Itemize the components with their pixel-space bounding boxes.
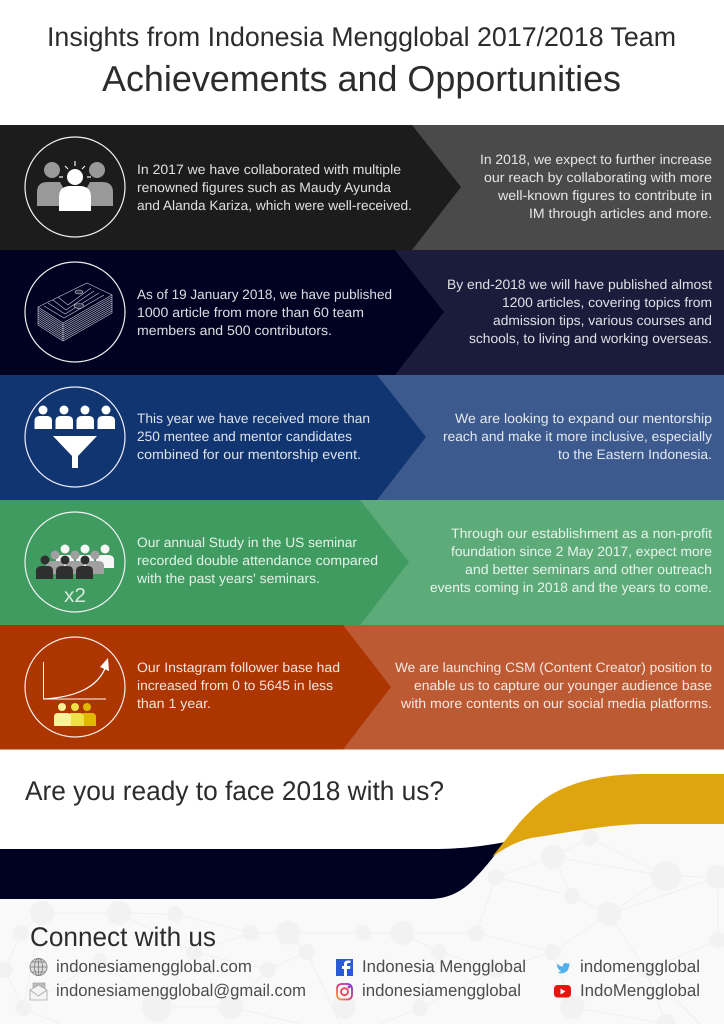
text: 2018 collaboration: [480, 152, 712, 221]
text: 1000 articles: members and 500 contributors.: [137, 323, 332, 338]
text: seminar attendance: [136, 535, 378, 586]
text: seminar attendance: Our annual Study in the US seminar: [137, 535, 357, 550]
navy wave: [0, 842, 505, 899]
contact: facebook: Indonesia Mengglobal: [362, 957, 526, 976]
text: mentorship 2018: [443, 411, 712, 462]
icon: envelope: [30, 983, 47, 1000]
text: 2017 collaboration: renowned figures such as Maudy Ayunda: [137, 180, 391, 195]
icon: globe: [30, 958, 47, 976]
icon: people and funnel: [25, 387, 125, 487]
icon: people with highlighted figure: [25, 137, 125, 237]
title: [47, 22, 676, 99]
text: seminar attendance: with the past years' seminars.: [136, 571, 320, 586]
title: Insights from Indonesia Mengglobal 2017/2018 Team: [47, 22, 676, 52]
text: follower growth: increased from 0 to 5645 in less: [137, 678, 333, 693]
text: 2018 collaboration: In 2018, we expect to further increase: [480, 152, 712, 167]
text: 2018 collaboration: well-known figures to contribute in: [497, 188, 712, 203]
icon: growth chart with people: [25, 637, 125, 737]
contact: instagram: indonesiamengglobal: [362, 981, 521, 1000]
text: non-profit foundation: and better seminars and other outreach: [465, 562, 712, 577]
text: 1000 articles: 1000 article from more than 60 team: [137, 305, 364, 320]
text: content creator position: with more contents on our social media platforms.: [400, 696, 712, 711]
panel: mentorship: [0, 375, 724, 500]
text: non-profit foundation: events coming in 2018 and the years to come.: [430, 580, 712, 595]
icon: stack of papers: [25, 262, 125, 362]
text: 2018 collaboration: IM through articles and more.: [529, 206, 712, 221]
text: 1000 articles: As of 19 January 2018, we have published: [137, 287, 392, 302]
icon: doubled audience: x2: [64, 585, 86, 607]
text: mentorship 2017: 250 mentee and mentor candidates: [137, 429, 352, 444]
text: content creator position: [395, 660, 712, 711]
text: mentorship 2017: This year we have received more than: [137, 411, 370, 426]
text: 1200 articles: 1200 articles, covering topics from: [502, 295, 712, 310]
text: 2017 collaboration: In 2017 we have collaborated with multiple: [137, 162, 401, 177]
text: mentorship 2017: combined for our mentorship event.: [137, 447, 361, 462]
text: non-profit foundation: Through our establishment as a non-profit: [451, 526, 712, 541]
text: 1200 articles: admission tips, various courses and: [493, 313, 712, 328]
panel: articles: [0, 250, 724, 375]
icon: twitter: [557, 963, 570, 973]
text: 2017 collaboration: and Alanda Kariza, which were well-received.: [137, 198, 412, 213]
text: mentorship 2018: reach and make it more inclusive, especially: [443, 429, 712, 444]
text: 1000 articles: [137, 287, 392, 338]
icon: youtube: [554, 985, 571, 998]
text: mentorship 2017: [137, 411, 370, 462]
panel: instagram: [0, 625, 724, 750]
text: seminar attendance: recorded double attendance compared: [137, 553, 378, 568]
text: mentorship 2018: We are looking to expand our mentorship: [455, 411, 712, 426]
gold wave: [492, 774, 724, 857]
white area above wave: [0, 750, 724, 857]
text: non-profit foundation: [430, 526, 712, 595]
icon: instagram: [337, 984, 352, 1000]
text: 2018 collaboration: our reach by collaborating with more: [484, 170, 712, 185]
text: 2017 collaboration: [137, 162, 412, 213]
icon: facebook: [336, 959, 353, 976]
text: content creator position: We are launching CSM (Content Creator) position to: [395, 660, 712, 675]
closing question: Are you ready to face 2018 with us?: [25, 776, 444, 806]
contact: twitter: indomengglobal: [580, 957, 700, 976]
text: follower growth: [137, 660, 340, 711]
text: content creator position: enable us to capture our younger audience base: [414, 678, 712, 693]
title: Achievements and Opportunities: [102, 58, 621, 99]
text: 1200 articles: schools, to living and working overseas.: [469, 331, 712, 346]
contact: website: indonesiamengglobal.com: [56, 957, 252, 976]
text: 1200 articles: [447, 277, 712, 346]
contact: youtube: IndoMengglobal: [580, 981, 700, 1000]
text: mentorship 2018: to the Eastern Indonesia.: [558, 447, 712, 462]
text: follower growth: Our Instagram follower base had: [137, 660, 340, 675]
text: follower growth: than 1 year.: [137, 696, 211, 711]
panel: seminars: [0, 500, 724, 625]
contact: email: indonesiamengglobal@gmail.com: [56, 981, 306, 1000]
heading: connect with us: Connect with us: [30, 922, 216, 952]
network background: [0, 820, 724, 1024]
panel: figures collaboration: [0, 125, 724, 250]
icon: doubled audience: [25, 512, 125, 612]
text: 1200 articles: By end-2018 we will have published almost: [447, 277, 712, 292]
text: non-profit foundation: foundation since 2 May 2017, expect more: [451, 544, 712, 559]
